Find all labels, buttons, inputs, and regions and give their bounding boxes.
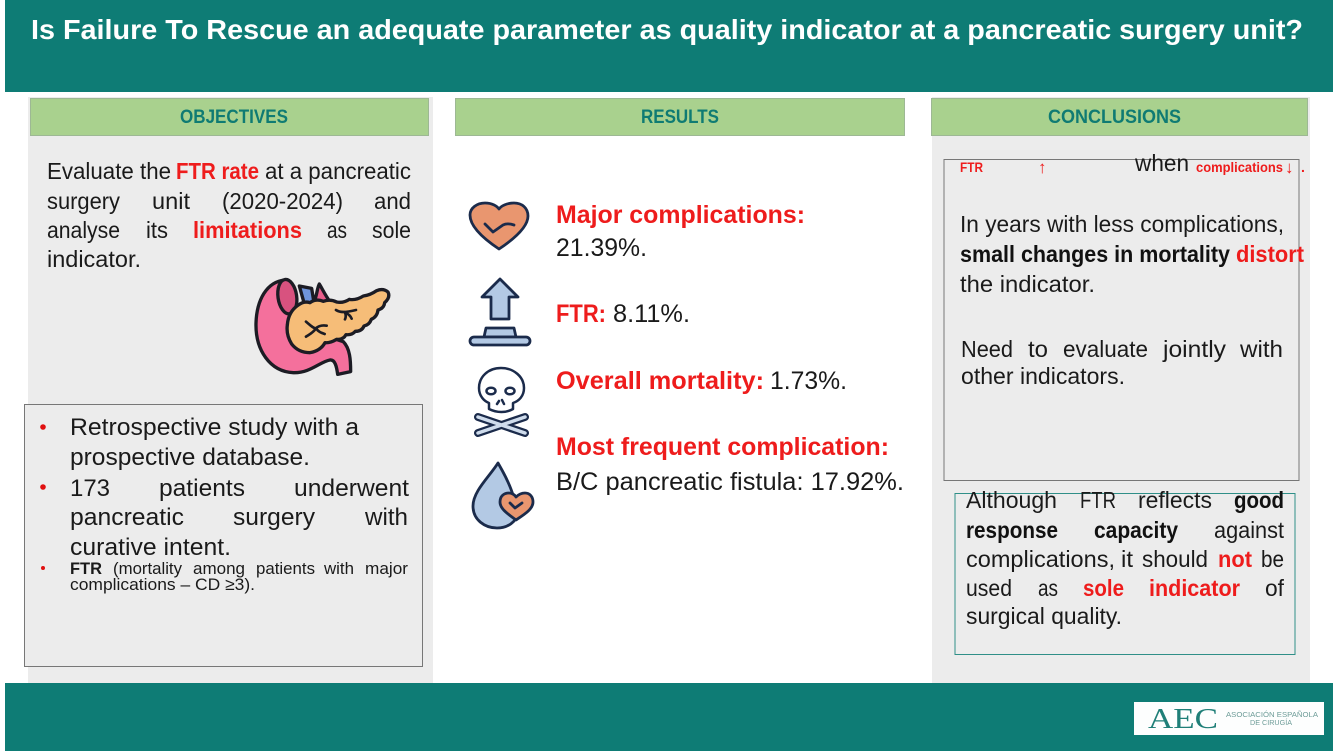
- result: FTR: FTR:: [556, 300, 606, 328]
- conclusions box: ↑: [1038, 158, 1046, 177]
- conclusions box: .: [1301, 159, 1305, 175]
- conclusions box: small changes in mortality: [960, 241, 1230, 267]
- methods list: among: [193, 559, 245, 578]
- methods list: (mortality: [113, 559, 182, 578]
- conclusions box: jointly: [1162, 336, 1227, 362]
- methods list: curative intent.: [70, 534, 231, 561]
- header band: [5, 0, 1333, 92]
- panel: objectives: [24, 97, 433, 683]
- final message box: FTR: [1080, 487, 1116, 513]
- final message box: response: [966, 517, 1058, 543]
- objectives text: indicator.: [47, 246, 141, 272]
- methods list: patients: [256, 559, 315, 578]
- methods list: Retrospective study with a: [70, 414, 360, 441]
- icon: heart: [470, 203, 528, 249]
- objectives text: as: [327, 217, 347, 243]
- objectives text: analyse: [47, 217, 120, 243]
- objectives text: limitations: [193, 217, 302, 243]
- logo: AEC: AEC: [1148, 704, 1218, 735]
- methods list: FTR: [70, 559, 102, 578]
- result: most frequent complication: Most frequent complication:: [556, 433, 889, 461]
- final message box: as: [1038, 575, 1058, 601]
- result: major complications: [556, 201, 805, 262]
- methods list: underwent: [294, 475, 409, 502]
- final message box: be: [1261, 546, 1284, 572]
- methods box: [24, 404, 422, 666]
- methods list: surgery: [233, 504, 315, 531]
- methods list: 173: [70, 475, 110, 502]
- result: major complications: Major complications:: [556, 201, 805, 229]
- conclusions box: [944, 150, 1305, 480]
- conclusions box: other indicators.: [961, 363, 1125, 389]
- result: overall mortality: Overall mortality:: [556, 367, 764, 395]
- logo: AEC: DE CIRUGÍA: [1250, 718, 1292, 727]
- conclusions box: Need: [961, 336, 1013, 362]
- objectives text: Evaluate the: [47, 158, 171, 184]
- icon: arrow up on button: [470, 279, 530, 345]
- conclusions heading: [932, 98, 1308, 136]
- methods list: pancreatic: [70, 504, 184, 531]
- conclusions box: to: [1028, 336, 1048, 362]
- methods list: with: [364, 504, 408, 531]
- logo: AEC: [1134, 702, 1324, 735]
- methods list: complications – CD ≥3).: [70, 575, 255, 594]
- final message box: surgical quality.: [966, 603, 1122, 629]
- panel: results: [456, 98, 904, 528]
- final message box: against: [1214, 517, 1285, 543]
- results heading: RESULTS: [641, 107, 719, 128]
- methods list: with: [323, 559, 354, 578]
- icon: pancreas: [256, 278, 389, 374]
- methods list: [40, 414, 409, 594]
- objectives text: FTR rate: [176, 158, 259, 184]
- objectives text: (2020-2024): [222, 188, 343, 214]
- final message box: capacity: [1094, 517, 1178, 543]
- icon: drop with heart: [473, 463, 533, 528]
- objectives heading: OBJECTIVES: [180, 107, 288, 128]
- icon: skull and crossbones: [478, 368, 525, 433]
- conclusions box: In years with less complications,: [960, 211, 1284, 237]
- final message box: reflects: [1138, 487, 1212, 513]
- final message box: it: [1121, 546, 1134, 572]
- final message box: [955, 487, 1295, 654]
- conclusions box: with: [1239, 336, 1283, 362]
- conclusions box: evaluate: [1063, 336, 1148, 362]
- result: most frequent complication: B/C pancreatic fistula: 17.92%.: [556, 468, 904, 496]
- conclusions box: FTR: [960, 159, 983, 175]
- conclusions box: ↓: [1285, 158, 1294, 177]
- final message box: indicator: [1149, 575, 1240, 601]
- final message box: Although: [966, 487, 1057, 513]
- result: most frequent complication: [556, 433, 904, 496]
- objectives text: surgery: [47, 188, 120, 214]
- methods list: prospective database.: [70, 444, 310, 471]
- final message box: not: [1218, 546, 1252, 572]
- final message box: complications,: [966, 546, 1115, 572]
- conclusions box: complications: [1196, 159, 1283, 175]
- objectives text: at a pancreatic: [265, 158, 411, 184]
- conclusions box: the indicator.: [960, 271, 1095, 297]
- footer band: [5, 683, 1333, 751]
- result: FTR: 8.11%.: [613, 300, 690, 328]
- objectives text: unit: [152, 188, 191, 214]
- final message box: good: [1234, 487, 1284, 513]
- result: overall mortality: 1.73%.: [770, 367, 847, 395]
- final message box: sole: [1083, 575, 1124, 601]
- objectives text: sole: [372, 217, 411, 243]
- conclusions heading: CONCLUSIONS: [1048, 107, 1181, 128]
- methods list: major: [365, 559, 408, 578]
- objectives heading: [30, 98, 428, 136]
- conclusions box: when: [1134, 150, 1189, 176]
- panel: conclusions: [932, 97, 1310, 683]
- objectives text: [47, 158, 411, 272]
- title: Is Failure To Rescue an adequate parameter as quality indicator at a pancreatic surgery unit?: [31, 14, 1303, 45]
- conclusions box: distort: [1236, 241, 1304, 267]
- result: major complications: 21.39%.: [556, 234, 647, 262]
- final message box: should: [1142, 546, 1208, 572]
- results heading: [456, 98, 904, 136]
- final message box: used: [966, 575, 1012, 601]
- final message box: of: [1265, 575, 1285, 601]
- methods list: patients: [159, 475, 245, 502]
- objectives text: its: [146, 217, 168, 243]
- logo: AEC: ASOCIACIÓN ESPAÑOLA: [1226, 710, 1318, 719]
- result: FTR: [556, 300, 690, 328]
- objectives text: and: [374, 188, 411, 214]
